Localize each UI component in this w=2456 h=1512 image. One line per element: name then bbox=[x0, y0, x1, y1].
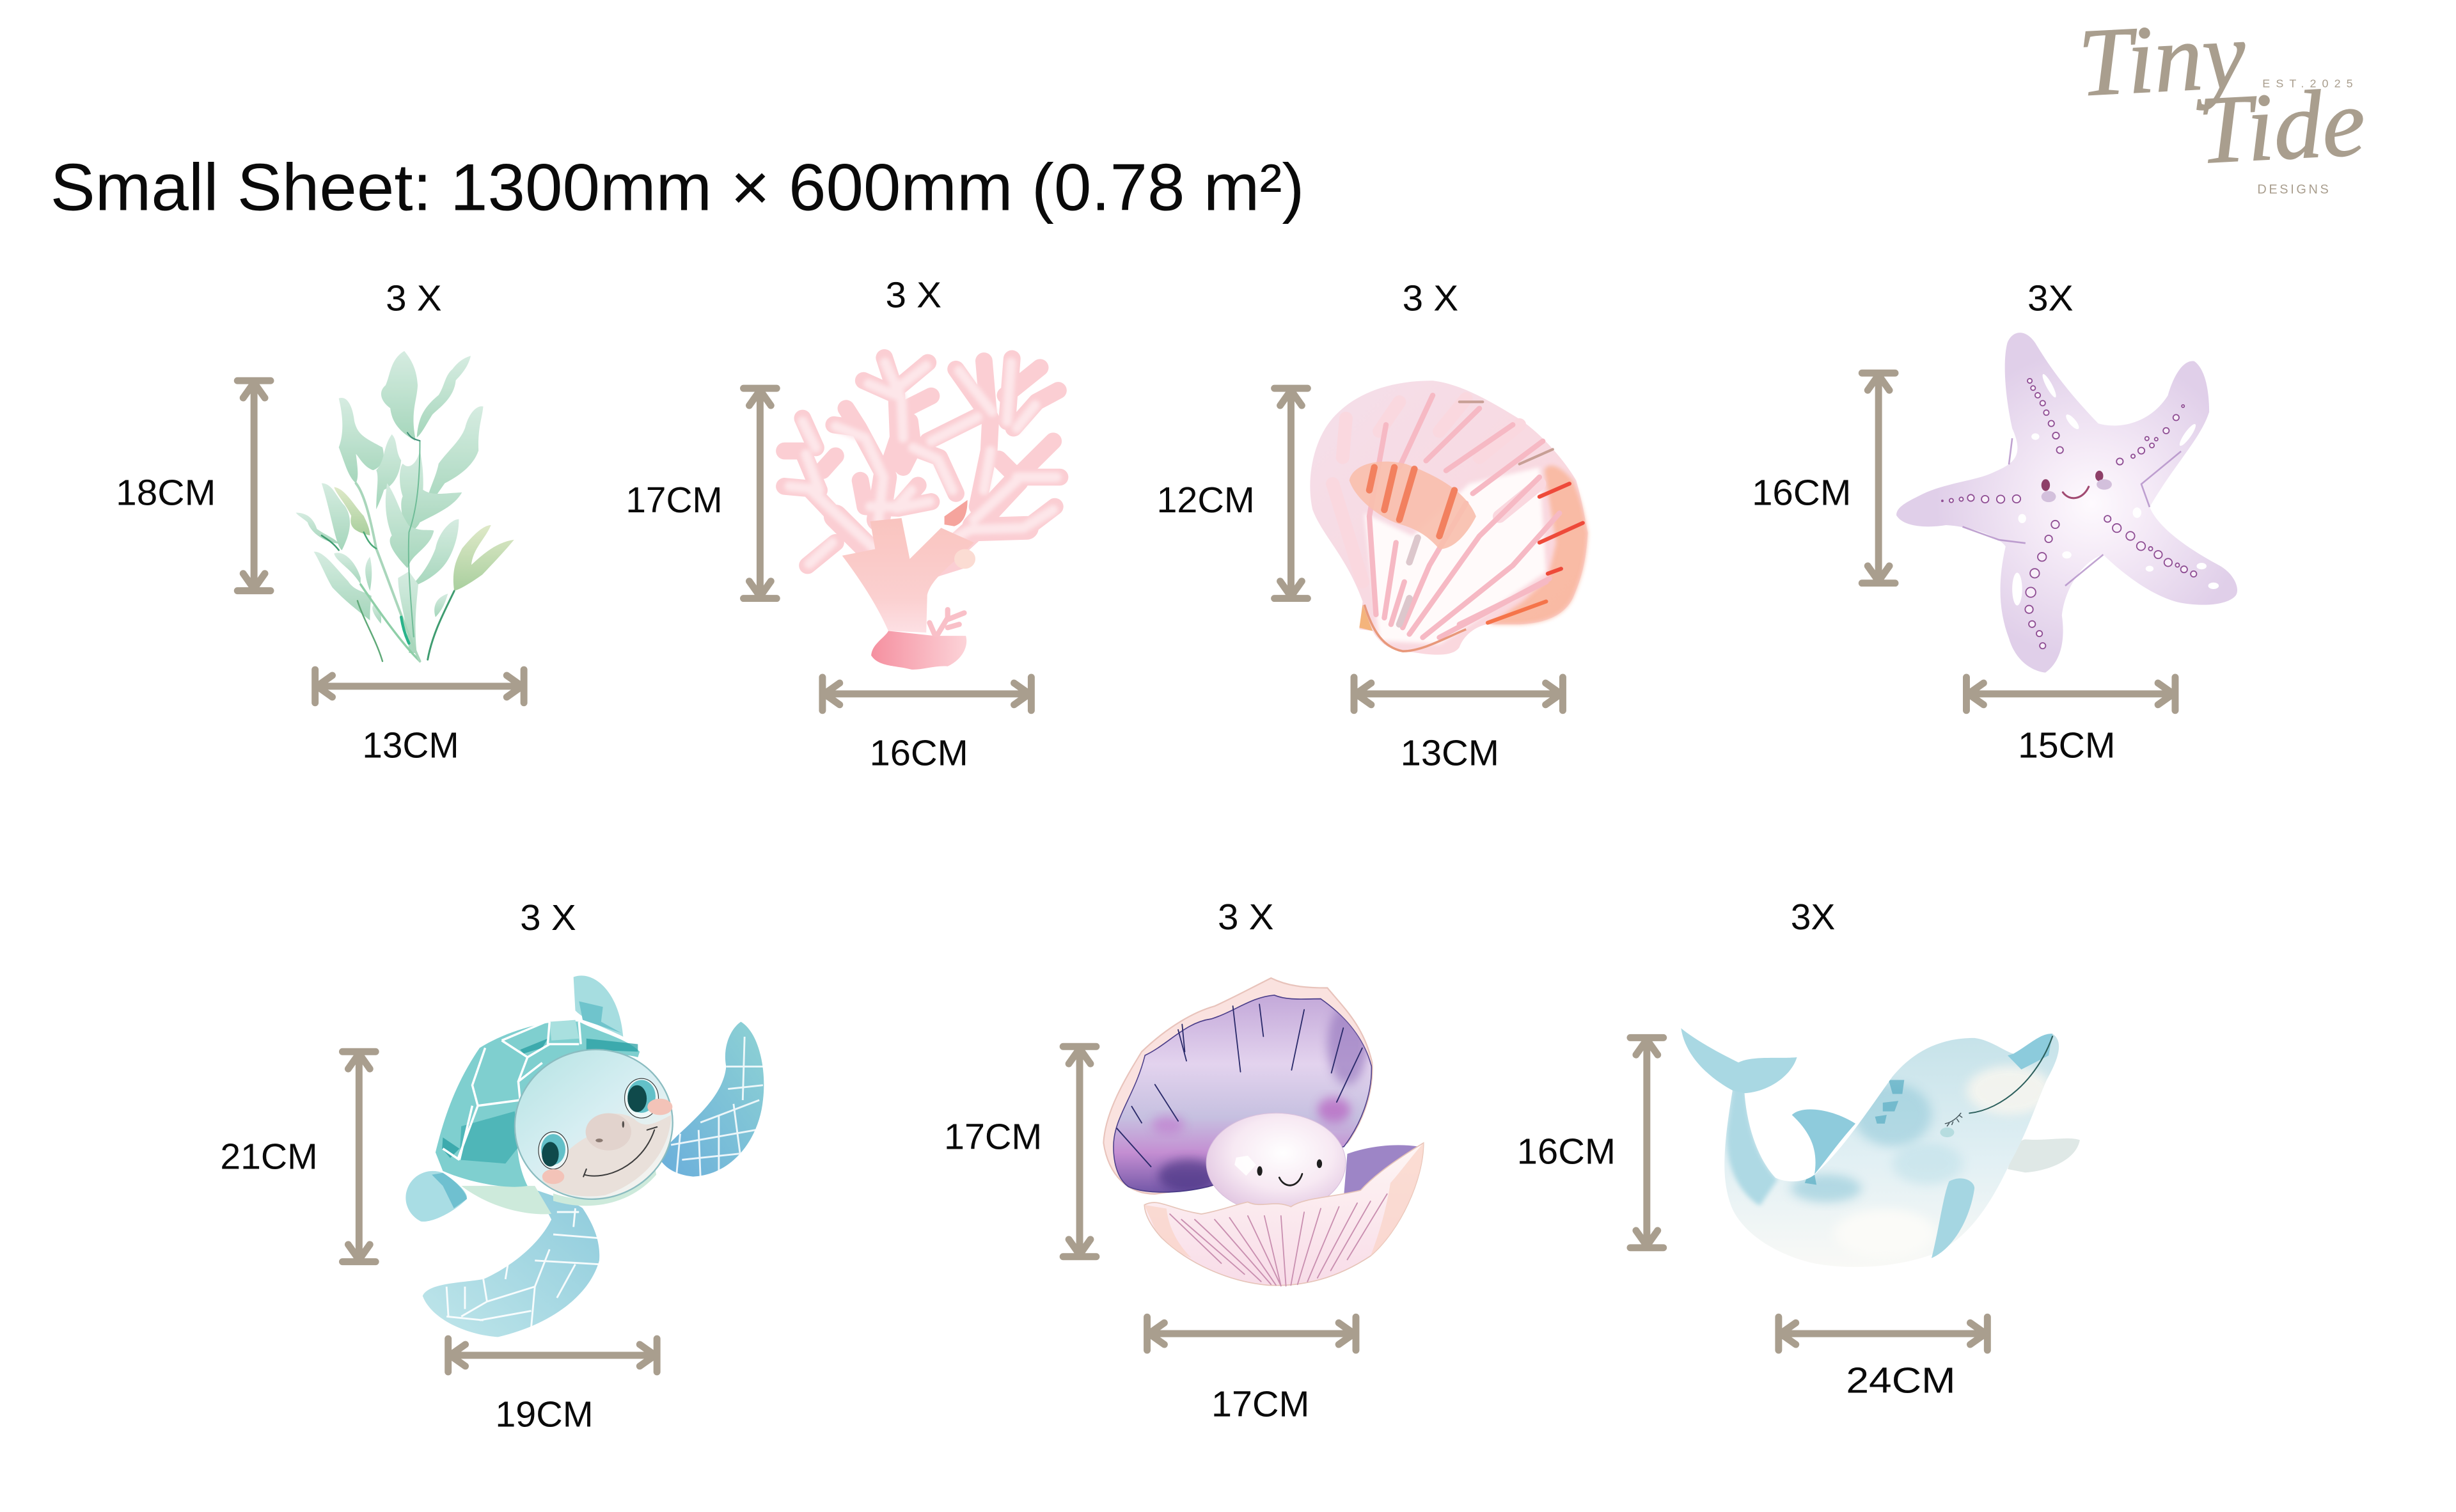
width label: 15CM bbox=[2018, 725, 2115, 766]
width arrow: 15CM bbox=[1966, 677, 2175, 711]
height arrow: 16CM bbox=[1630, 1037, 1664, 1248]
logo script: Tide: Tide bbox=[2196, 68, 2368, 184]
carapace bbox=[436, 1021, 640, 1187]
pearl bbox=[1206, 1113, 1346, 1213]
panel: clam with pearl bbox=[944, 897, 1424, 1425]
width arrow: 13CM bbox=[1354, 677, 1563, 711]
coral trunk bbox=[842, 518, 974, 633]
lower shell ribs bbox=[1170, 1194, 1387, 1286]
coral base bbox=[871, 631, 966, 670]
orange band bbox=[1350, 462, 1476, 549]
top shell rim bbox=[1103, 978, 1373, 1194]
illustration: sea turtle bbox=[405, 975, 764, 1337]
pearl highlight bbox=[1234, 1156, 1256, 1176]
height label: 17CM bbox=[626, 480, 723, 521]
right inner shell bbox=[1344, 1145, 1419, 1194]
cheek bbox=[1940, 1128, 1954, 1137]
panel: seaweed bbox=[116, 279, 524, 766]
illustration: starfish bbox=[1896, 333, 2237, 673]
stems bbox=[322, 432, 454, 661]
panel: starfish bbox=[1752, 279, 2237, 766]
snout bbox=[542, 1114, 671, 1197]
spots bbox=[1942, 379, 2196, 649]
red accents bbox=[1369, 468, 1583, 623]
pale fan bbox=[1364, 468, 1546, 644]
shell body bbox=[1310, 381, 1588, 655]
top flipper bbox=[574, 975, 623, 1037]
cheeks and smile bbox=[542, 1099, 672, 1184]
body washes bbox=[1791, 1066, 2052, 1258]
width arrow: 16CM bbox=[823, 677, 1031, 711]
right flipper bbox=[658, 1022, 764, 1177]
illustration: seaweed bbox=[295, 351, 514, 661]
tail fluke bbox=[1681, 1028, 1797, 1093]
quantity label: 3X bbox=[1791, 897, 1835, 938]
height arrow: 17CM bbox=[1063, 1046, 1096, 1257]
rim bbox=[1490, 466, 1588, 624]
illustration: coral bbox=[785, 358, 1060, 670]
panel: scallop shell bbox=[1156, 279, 1588, 773]
logo: Tiny Tide Designs bbox=[2076, 1, 2368, 197]
small coral sprig bbox=[929, 610, 964, 634]
head bbox=[503, 1037, 684, 1212]
left flipper bbox=[405, 1171, 467, 1222]
logo tagline: designs: DESIGNS bbox=[2257, 183, 2329, 197]
illustration: clam with pearl bbox=[1103, 978, 1424, 1286]
ribs bbox=[1333, 395, 1559, 638]
width arrow: 17CM bbox=[1147, 1317, 1356, 1350]
height label: 16CM bbox=[1517, 1131, 1616, 1172]
pearl face bbox=[1257, 1160, 1322, 1185]
white flecks bbox=[2012, 373, 2219, 606]
width label: 13CM bbox=[362, 725, 459, 766]
height arrow: 16CM bbox=[1862, 373, 1895, 583]
logo script: Tiny: Tiny bbox=[2076, 1, 2249, 116]
quantity label: 3 X bbox=[1403, 279, 1458, 319]
lower shell bbox=[1144, 1143, 1424, 1286]
coral branches bbox=[785, 358, 1060, 575]
width arrow: 13CM bbox=[315, 670, 524, 703]
width arrow: 24CM bbox=[1779, 1317, 1987, 1350]
illustration: scallop shell bbox=[1310, 381, 1588, 655]
height label: 18CM bbox=[116, 473, 216, 513]
height label: 21CM bbox=[220, 1137, 318, 1177]
dorsal fin bbox=[1792, 1109, 1855, 1174]
mouth line bbox=[1969, 1036, 2052, 1113]
bottom flipper bbox=[423, 1190, 599, 1337]
far fin bbox=[2008, 1138, 2080, 1172]
height arrow: 17CM bbox=[744, 388, 776, 599]
belly bbox=[461, 1163, 656, 1214]
quantity label: 3 X bbox=[386, 279, 442, 319]
width label: 19CM bbox=[495, 1394, 594, 1435]
snout bbox=[2008, 1034, 2052, 1069]
height label: 16CM bbox=[1752, 473, 1851, 513]
height arrow: 12CM bbox=[1275, 388, 1307, 599]
eyes bbox=[539, 1078, 659, 1169]
panel: sea turtle bbox=[220, 898, 764, 1435]
width label: 13CM bbox=[1401, 733, 1499, 773]
quantity label: 3X bbox=[2027, 279, 2074, 319]
pectoral fin bbox=[1932, 1178, 1974, 1258]
panel: coral bbox=[626, 276, 1060, 773]
width label: 16CM bbox=[870, 733, 968, 773]
shell lines bbox=[443, 1022, 581, 1160]
star body bbox=[1896, 333, 2237, 673]
olive leaves bbox=[334, 487, 514, 591]
height label: 12CM bbox=[1156, 480, 1255, 521]
shell ridge lines bbox=[1117, 1004, 1362, 1167]
width arrow: 19CM bbox=[448, 1339, 657, 1372]
quantity label: 3 X bbox=[885, 276, 941, 316]
body bbox=[1724, 1034, 2059, 1267]
shadow strokes bbox=[1963, 438, 2181, 586]
quantity label: 3 X bbox=[1218, 897, 1274, 938]
height arrow: 21CM bbox=[342, 1051, 375, 1262]
tail stem bbox=[1727, 1087, 1777, 1206]
illustration: dolphin bbox=[1681, 1028, 2080, 1267]
hinge bbox=[1364, 605, 1466, 651]
logo tagline: est: EST.2025 bbox=[2262, 77, 2353, 90]
width label: 17CM bbox=[1211, 1385, 1309, 1425]
height arrow: 18CM bbox=[237, 381, 271, 591]
eye lashes bbox=[1945, 1113, 1962, 1126]
lower shell edge bbox=[1144, 1143, 1424, 1258]
shell washes bbox=[1152, 1004, 1367, 1192]
top shell interior bbox=[1114, 995, 1371, 1192]
height label: 17CM bbox=[944, 1117, 1042, 1158]
panel: dolphin bbox=[1517, 897, 2080, 1401]
width label: 24CM bbox=[1846, 1361, 1956, 1401]
title: Small Sheet: 1300mm × 600mm (0.78 m²) bbox=[51, 150, 1304, 224]
face bbox=[2042, 471, 2112, 502]
quantity label: 3 X bbox=[520, 898, 576, 938]
